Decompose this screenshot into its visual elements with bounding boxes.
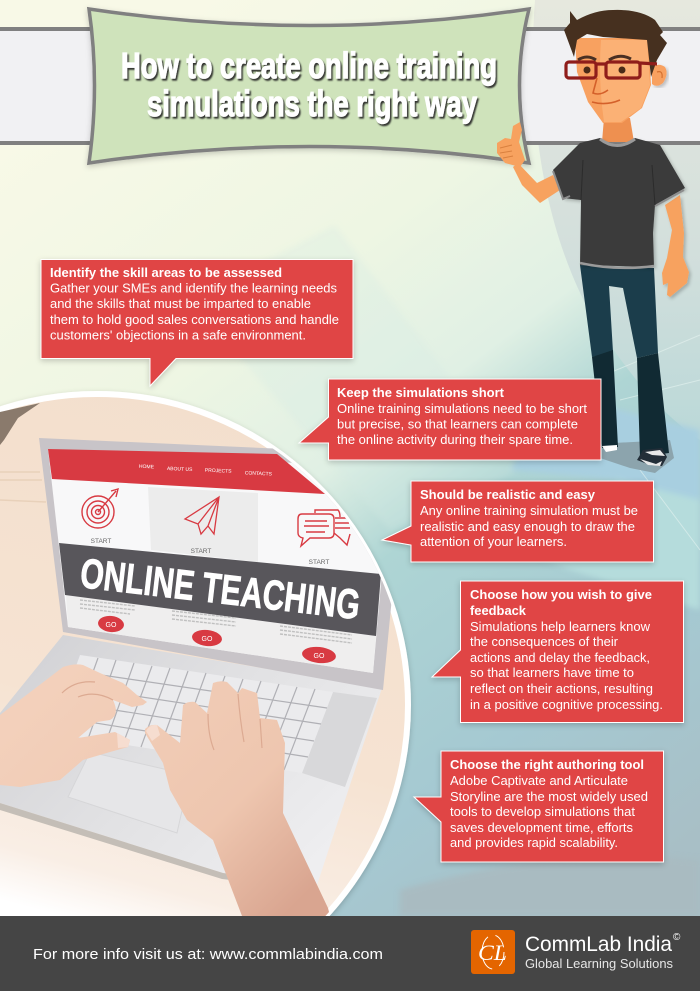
callout 3 bbox=[382, 481, 654, 562]
thumb-up arm and hand bbox=[497, 122, 560, 203]
face bbox=[575, 38, 651, 123]
GO buttons: GO bbox=[314, 653, 325, 660]
dark band bbox=[59, 543, 381, 636]
photo: laptop in circle bbox=[0, 390, 414, 916]
callout 2: but precise, so that learners can complete bbox=[337, 416, 578, 432]
callout 5: tools to develop simulations that bbox=[450, 804, 635, 819]
callout 5: saves development time, efforts bbox=[450, 820, 633, 835]
glasses bbox=[566, 62, 657, 78]
START labels: START bbox=[309, 559, 329, 566]
screen nav labels bbox=[139, 464, 272, 476]
footer bbox=[0, 916, 700, 991]
brand name: CommLab India bbox=[525, 933, 672, 956]
callout 3: Should be realistic and easy bbox=[420, 487, 596, 502]
callout 4: feedback bbox=[470, 603, 527, 618]
t-shirt bbox=[553, 138, 685, 268]
right hand bbox=[145, 681, 330, 916]
copyright mark: © bbox=[673, 932, 681, 943]
keyboard bbox=[76, 655, 327, 770]
icon: CommLab logo: CL bbox=[478, 940, 507, 965]
screen nav labels: CONTACTS bbox=[245, 470, 273, 478]
floor shadow bbox=[596, 440, 674, 473]
ear bbox=[652, 65, 667, 86]
callout 2: Keep the simulations short bbox=[337, 385, 505, 400]
callout 1: customers' objections in a safe environment. bbox=[50, 328, 306, 342]
neck bbox=[602, 118, 634, 142]
callout 5: Choose the right authoring tool bbox=[450, 757, 644, 772]
jeans bbox=[580, 265, 669, 457]
desk details bbox=[0, 403, 46, 502]
START labels bbox=[91, 538, 329, 566]
callout 2: the online activity during their spare time. bbox=[337, 432, 573, 447]
eyes and brows bbox=[578, 56, 631, 74]
header band bbox=[0, 27, 700, 145]
GO buttons bbox=[97, 615, 337, 665]
left hand bbox=[0, 664, 147, 787]
right arm bbox=[662, 195, 689, 297]
GO buttons: GO bbox=[106, 622, 117, 629]
icon: speech bubbles bbox=[298, 510, 350, 546]
icon: target bbox=[82, 489, 118, 528]
callout 4: Choose how you wish to give bbox=[470, 587, 652, 602]
screen headline: ONLINE TEACHING bbox=[78, 549, 363, 628]
screen nav labels: PROJECTS bbox=[205, 468, 232, 475]
callout 4 bbox=[432, 581, 684, 722]
icon: paper plane bbox=[185, 497, 219, 534]
callout 4: Simulations help learners know bbox=[470, 619, 651, 634]
callout 3: realistic and easy enough to draw the bbox=[420, 519, 635, 534]
callout 1: Gather your SMEs and identify the learning needs bbox=[50, 280, 337, 296]
callout 3: Any online training simulation must be bbox=[420, 503, 638, 518]
laptop screen bbox=[48, 449, 382, 673]
title: How to create online training bbox=[121, 45, 497, 86]
footer link text: For more info visit us at: www.commlabindia.com bbox=[33, 946, 383, 963]
callout 1: and the skills that must be imparted to enable bbox=[50, 296, 311, 311]
laptop base bbox=[0, 635, 382, 890]
title: simulations the right way bbox=[147, 83, 477, 124]
character bbox=[497, 10, 689, 473]
icon: CommLab logo bbox=[471, 930, 515, 974]
callout 2: Online training simulations need to be short bbox=[337, 401, 587, 416]
callout 5 bbox=[414, 751, 664, 862]
callout 3: attention of your learners. bbox=[420, 534, 567, 549]
START labels: START bbox=[191, 548, 211, 555]
callout 2 bbox=[299, 379, 601, 460]
callout 4: the consequences of their bbox=[470, 634, 619, 649]
callout 4: in a positive cognitive processing. bbox=[470, 697, 663, 712]
shoes bbox=[602, 445, 667, 466]
callout 1: them to hold good sales conversations and handle bbox=[50, 312, 339, 327]
callout 5: Storyline are the most widely used bbox=[450, 789, 648, 804]
screen nav labels: HOME bbox=[139, 464, 155, 470]
laptop lid bbox=[39, 438, 420, 690]
tagline: Global Learning Solutions bbox=[525, 956, 673, 971]
callout 1: Identify the skill areas to be assessed bbox=[50, 265, 282, 280]
title bbox=[121, 45, 497, 124]
screen nav labels: ABOUT US bbox=[167, 466, 193, 473]
callout 4: so that learners have time to bbox=[470, 665, 634, 680]
START labels: START bbox=[91, 538, 111, 545]
callout 5: and provides rapid scalability. bbox=[450, 835, 618, 850]
callout 4: reflect on their actions, resulting bbox=[470, 681, 653, 696]
callout 1 bbox=[41, 260, 353, 386]
GO buttons: GO bbox=[202, 636, 213, 643]
hair bbox=[564, 10, 667, 77]
callout 5: Adobe Captivate and Articulate bbox=[450, 773, 628, 788]
nose and mouth bbox=[592, 78, 620, 104]
title banner bbox=[89, 9, 529, 163]
screen filler text bbox=[80, 600, 352, 643]
callout 4: actions and delay the feedback, bbox=[470, 650, 650, 665]
